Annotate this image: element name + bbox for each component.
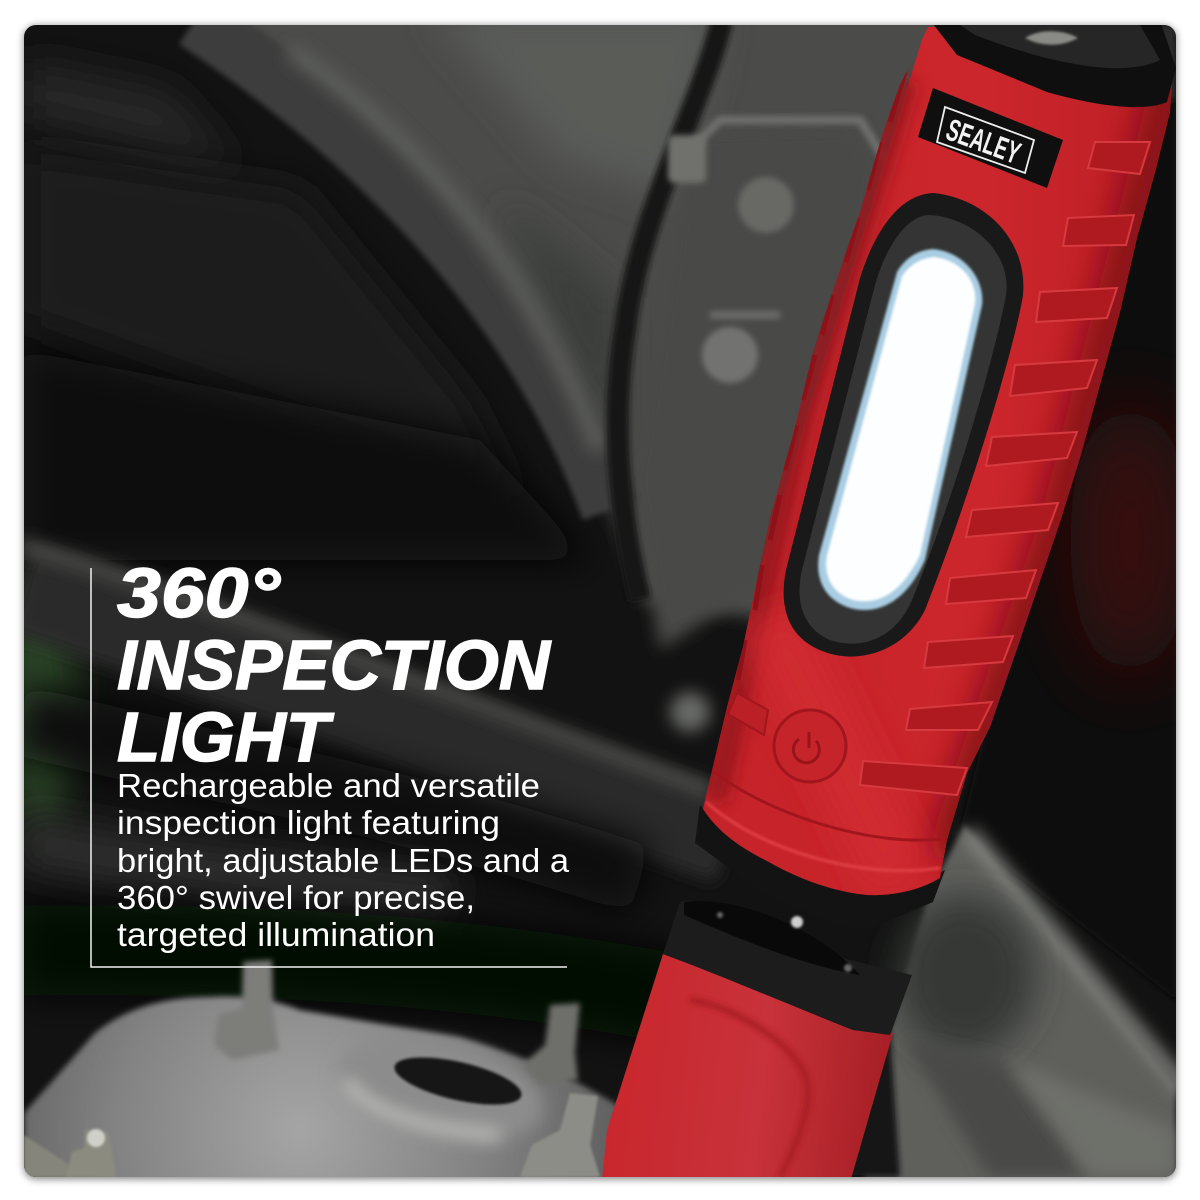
body text: [117, 768, 569, 954]
SEALEY badge: SEALEY: [942, 112, 1025, 171]
lower base: [600, 901, 912, 1200]
dark mid hose: [20, 950, 680, 1000]
curved arch band: [195, 20, 610, 510]
grip ribs: [860, 142, 1150, 795]
body text: bright, adjustable LEDs and a: [117, 843, 569, 880]
black hose: [618, 20, 722, 600]
bent pipe: [680, 120, 885, 160]
plate bolts: [738, 177, 794, 233]
large hose: [20, 590, 730, 840]
mounting plate: [645, 596, 726, 652]
handle body: [690, 20, 1175, 900]
body text: inspection light featuring: [117, 805, 500, 842]
black lamp surround: [784, 193, 1023, 657]
left-edge grip notches: [738, 72, 905, 680]
SEALEY badge: [918, 88, 1063, 188]
white LED panel: [818, 249, 982, 610]
edge shading: [945, 70, 1175, 860]
body text: Rechargeable and versatile: [117, 768, 540, 805]
right-side darkness: [961, 745, 1172, 996]
black top cap: [930, 20, 1176, 107]
wheel arch textures: [24, 60, 219, 157]
strut hole: [392, 1056, 524, 1106]
black collar: [695, 805, 945, 912]
upper grey bodywork: [248, 25, 936, 625]
swivel cap: [663, 901, 912, 1035]
strut ring highlight: [344, 1028, 546, 1137]
heading: 360°: [117, 554, 281, 632]
strut bolts: [214, 960, 279, 1060]
inspection light: [600, 20, 1176, 1200]
heading: INSPECTION: [117, 626, 551, 704]
heading: LIGHT: [117, 698, 334, 776]
lower left glow: [4, 570, 76, 830]
heading: [117, 554, 551, 776]
caption bracket: [91, 568, 567, 967]
right bracket: [860, 825, 1176, 1200]
body text: targeted illumination: [117, 917, 435, 954]
strut top metal: [24, 992, 616, 1177]
body text: 360° swivel for precise,: [117, 880, 475, 917]
power button: [774, 710, 846, 782]
